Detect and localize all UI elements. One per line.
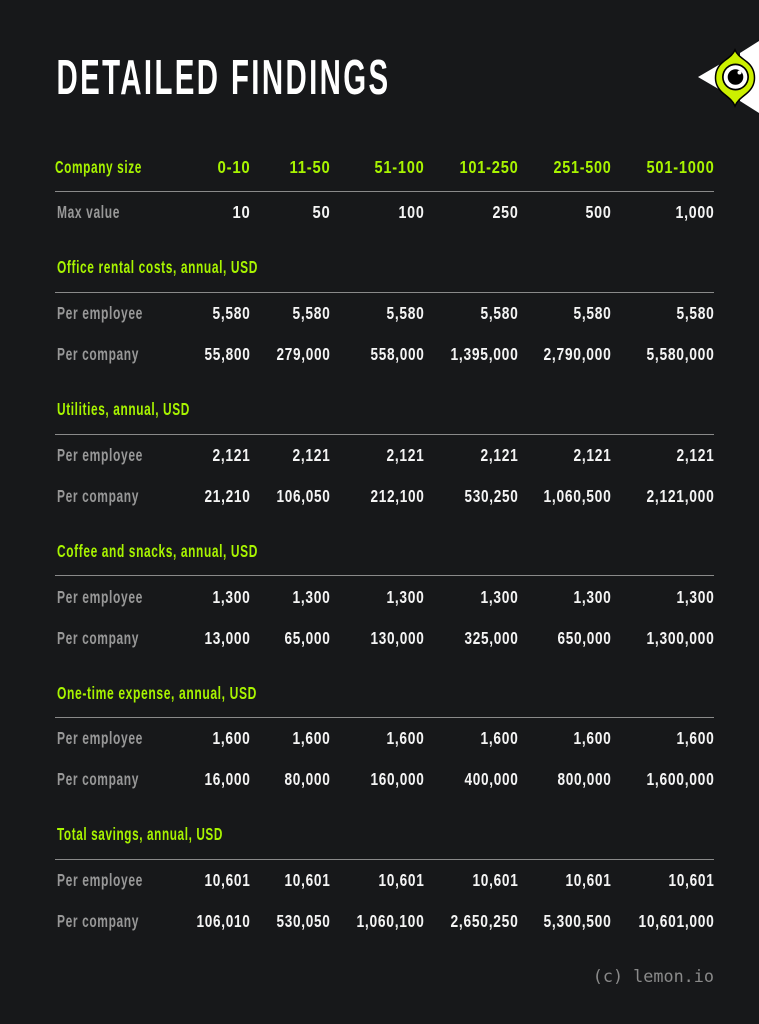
table header row — [55, 157, 714, 177]
section: office rental costs: 279,000 — [276, 344, 330, 364]
section: utilities: 1,060,500 — [544, 486, 612, 506]
row: max value: 100 — [398, 202, 424, 222]
section: coffee and snacks: 65,000 — [284, 628, 330, 648]
section: one-time expense: 800,000 — [558, 769, 612, 789]
row: max value: 500 — [586, 202, 612, 222]
section: coffee and snacks: 1,300 — [386, 587, 424, 607]
section: utilities: 2,121 — [386, 445, 424, 465]
section: total savings: 10,601 — [204, 870, 250, 890]
section: office rental costs: 2,790,000 — [544, 344, 612, 364]
section: coffee and snacks: 1,300,000 — [646, 628, 714, 648]
section: one-time expense: 1,600 — [574, 728, 612, 748]
section: total savings: 10,601 — [378, 870, 424, 890]
section: total savings: 5,300,500 — [544, 911, 612, 931]
section: one-time expense: One-time expense, annual, USD — [57, 683, 257, 703]
section: one-time expense: Per company — [57, 769, 139, 789]
section: utilities: 2,121 — [676, 445, 714, 465]
section: one-time expense: 1,600 — [212, 728, 250, 748]
table header row: 501-1000 — [646, 157, 714, 177]
table header row: 51-100 — [374, 157, 424, 177]
section: coffee and snacks: 1,300 — [676, 587, 714, 607]
row: max value: 10 — [232, 202, 250, 222]
section: coffee and snacks: 1,300 — [292, 587, 330, 607]
section: utilities: 2,121 — [574, 445, 612, 465]
row: max value: 1,000 — [676, 202, 714, 222]
section: utilities: 2,121,000 — [646, 486, 714, 506]
section: total savings: 10,601 — [472, 870, 518, 890]
section: total savings: 10,601 — [284, 870, 330, 890]
section: one-time expense: 1,600 — [480, 728, 518, 748]
section: office rental costs: 5,580 — [386, 303, 424, 323]
row: max value: Max value — [57, 202, 120, 222]
section: office rental costs: 1,395,000 — [450, 344, 518, 364]
section: utilities: Utilities, annual, USD — [57, 399, 190, 419]
section: total savings: Per employee — [57, 870, 143, 890]
table header row: 251-500 — [554, 157, 612, 177]
section: office rental costs: 5,580 — [212, 303, 250, 323]
section: coffee and snacks: 1,300 — [574, 587, 612, 607]
section: office rental costs: 5,580 — [574, 303, 612, 323]
section: total savings: 2,650,250 — [450, 911, 518, 931]
section: total savings: 10,601 — [668, 870, 714, 890]
section: utilities: 2,121 — [480, 445, 518, 465]
section: one-time expense: 160,000 — [370, 769, 424, 789]
row: max value: 50 — [312, 202, 330, 222]
section: one-time expense: Per employee — [57, 728, 143, 748]
section: utilities: 2,121 — [292, 445, 330, 465]
section: one-time expense: 1,600,000 — [646, 769, 714, 789]
table header row: Company size — [55, 157, 142, 177]
section: coffee and snacks: 325,000 — [464, 628, 518, 648]
section: utilities: 212,100 — [370, 486, 424, 506]
section: coffee and snacks: 650,000 — [558, 628, 612, 648]
section: office rental costs: Office rental costs, annual, USD — [57, 257, 258, 277]
section: total savings: 1,060,100 — [356, 911, 424, 931]
icon: lemon eye logo — [698, 41, 759, 113]
section: one-time expense: 1,600 — [292, 728, 330, 748]
row: max value: 250 — [492, 202, 518, 222]
section: one-time expense: 16,000 — [204, 769, 250, 789]
section: total savings: 106,010 — [196, 911, 250, 931]
section: total savings: 10,601 — [566, 870, 612, 890]
section: coffee and snacks: 1,300 — [212, 587, 250, 607]
section: utilities: Per employee — [57, 445, 143, 465]
table header row: 11-50 — [290, 157, 330, 177]
section: office rental costs: 5,580 — [480, 303, 518, 323]
section: office rental costs: 5,580 — [676, 303, 714, 323]
table header row: 101-250 — [460, 157, 518, 177]
section: one-time expense: 80,000 — [284, 769, 330, 789]
section: office rental costs: 5,580,000 — [646, 344, 714, 364]
section: office rental costs: 558,000 — [370, 344, 424, 364]
section: total savings — [55, 824, 714, 931]
row: max value — [57, 202, 714, 222]
section: total savings: Per company — [57, 911, 139, 931]
section: coffee and snacks: 1,300 — [480, 587, 518, 607]
section: one-time expense: 1,600 — [386, 728, 424, 748]
section: coffee and snacks: Coffee and snacks, annual, USD — [57, 541, 258, 561]
section: one-time expense: 1,600 — [676, 728, 714, 748]
section: one-time expense: 400,000 — [464, 769, 518, 789]
footer credit: (c) lemon.io — [593, 966, 714, 986]
section: coffee and snacks: Per company — [57, 628, 139, 648]
section: office rental costs: 5,580 — [292, 303, 330, 323]
section: one-time expense — [55, 683, 714, 789]
section: total savings: Total savings, annual, USD — [57, 824, 223, 844]
section: office rental costs: Per employee — [57, 303, 143, 323]
table header row: 0-10 — [218, 157, 250, 177]
section: utilities: 530,250 — [464, 486, 518, 506]
section: utilities — [55, 399, 714, 506]
section: coffee and snacks: 13,000 — [204, 628, 250, 648]
section: office rental costs — [55, 257, 714, 364]
title: DETAILED FINDINGS — [56, 50, 390, 105]
section: coffee and snacks: Per employee — [57, 587, 143, 607]
section: total savings: 10,601,000 — [638, 911, 714, 931]
section: utilities: Per company — [57, 486, 139, 506]
section: coffee and snacks: 130,000 — [370, 628, 424, 648]
section: office rental costs: 55,800 — [204, 344, 250, 364]
section: coffee and snacks — [55, 541, 714, 648]
section: utilities: 2,121 — [212, 445, 250, 465]
section: office rental costs: Per company — [57, 344, 139, 364]
section: total savings: 530,050 — [276, 911, 330, 931]
section: utilities: 21,210 — [204, 486, 250, 506]
section: utilities: 106,050 — [276, 486, 330, 506]
